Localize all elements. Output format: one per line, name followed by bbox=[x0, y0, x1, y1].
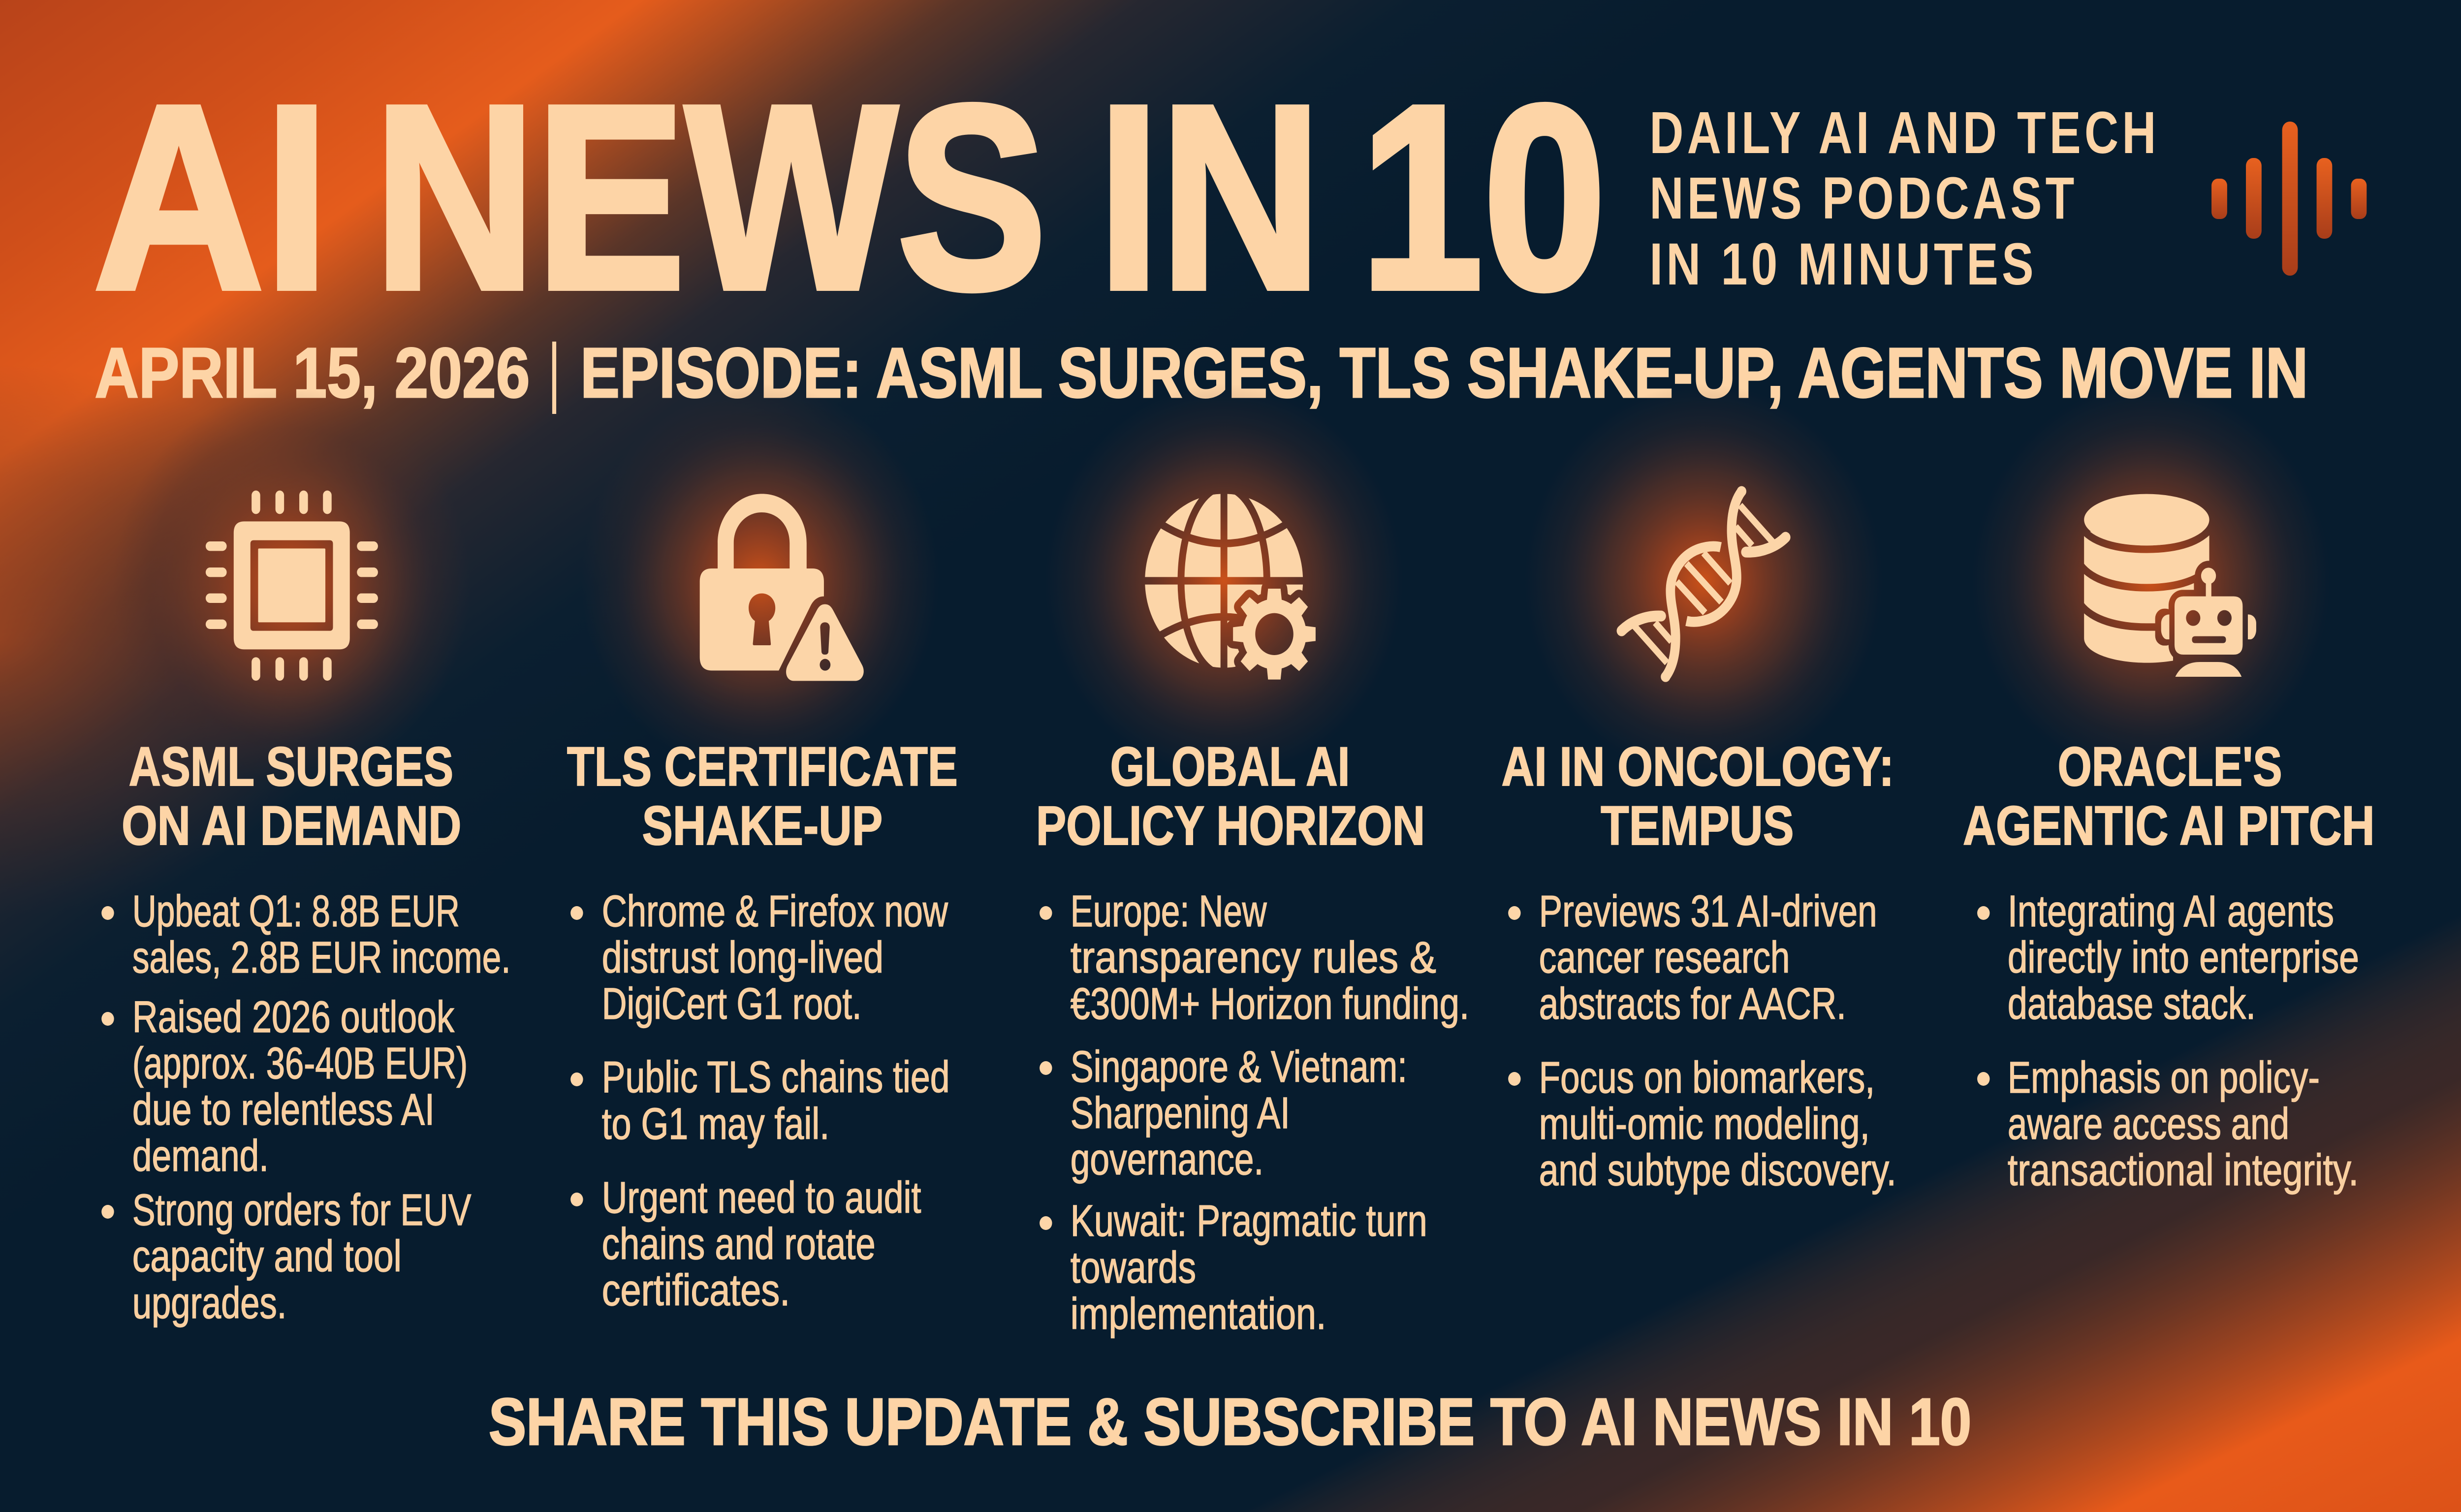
tagline: NEWS PODCAST bbox=[1649, 165, 2078, 231]
heading: TEMPUS bbox=[1601, 794, 1794, 856]
bullet list: Focus on biomarkers, bbox=[1539, 1053, 1875, 1102]
title: 10 bbox=[1360, 50, 1606, 344]
bullet list: abstracts for AACR. bbox=[1539, 979, 1846, 1029]
footer call to action: SHARE THIS UPDATE & SUBSCRIBE TO AI NEWS IN 10 bbox=[489, 1385, 1971, 1459]
bullet list: towards bbox=[1071, 1243, 1196, 1292]
bullet list: (approx. 36-40B EUR) bbox=[132, 1039, 468, 1088]
tagline: IN 10 MINUTES bbox=[1649, 231, 2037, 297]
heading: TLS CERTIFICATE bbox=[567, 735, 958, 797]
bullet list: cancer research bbox=[1539, 933, 1790, 982]
panel: TLS bbox=[567, 384, 958, 1315]
bullet list: Raised 2026 outlook bbox=[132, 992, 455, 1042]
heading bbox=[567, 735, 958, 856]
bullet list: implementation. bbox=[1071, 1289, 1326, 1339]
bullet list: DigiCert G1 root. bbox=[602, 979, 862, 1029]
icon: microchip bbox=[206, 491, 378, 681]
bullet list: transactional integrity. bbox=[2008, 1145, 2359, 1195]
bullet list: distrust long-lived bbox=[602, 933, 883, 982]
panel: Global policy bbox=[1036, 384, 1469, 1339]
bullet list: to G1 may fail. bbox=[602, 1099, 829, 1149]
icon: audio waveform bbox=[2211, 122, 2366, 276]
bullet list: transparency rules & bbox=[1071, 933, 1436, 982]
bullet list: Singapore & Vietnam: bbox=[1071, 1042, 1407, 1092]
bullet list: Public TLS chains tied bbox=[602, 1052, 950, 1102]
bullet list: capacity and tool bbox=[132, 1231, 402, 1281]
icon: globe with gear bbox=[1145, 494, 1316, 680]
bullet list: database stack. bbox=[2008, 979, 2256, 1029]
heading bbox=[1036, 735, 1425, 856]
heading: SHAKE-UP bbox=[642, 794, 883, 856]
bullet list: Upbeat Q1: 8.8B EUR bbox=[132, 886, 460, 936]
bullet list: aware access and bbox=[2008, 1099, 2289, 1149]
bullet list: Emphasis on policy- bbox=[2008, 1053, 2320, 1102]
bullet list: upgrades. bbox=[132, 1278, 286, 1328]
bullet list: €300M+ Horizon funding. bbox=[1071, 979, 1469, 1029]
bullet list: due to relentless AI bbox=[132, 1085, 435, 1134]
bullet list bbox=[1040, 886, 1469, 1339]
glow bbox=[581, 384, 939, 778]
heading: ORACLE'S bbox=[2058, 735, 2282, 797]
tagline bbox=[1649, 99, 2160, 297]
glow bbox=[113, 389, 471, 783]
heading: GLOBAL AI bbox=[1110, 735, 1350, 797]
bullet list: directly into enterprise bbox=[2008, 933, 2359, 982]
bullet list: sales, 2.8B EUR income. bbox=[132, 933, 510, 982]
heading bbox=[1502, 735, 1894, 856]
bullet list bbox=[1508, 886, 1896, 1195]
bullet list bbox=[570, 886, 950, 1315]
bullet list bbox=[101, 886, 510, 1328]
bullet list: Europe: New bbox=[1071, 886, 1267, 936]
icon: padlock with warning triangle bbox=[700, 494, 864, 681]
bullet list: Previews 31 AI-driven bbox=[1539, 886, 1877, 936]
panel: ASML bbox=[101, 389, 510, 1328]
heading: AGENTIC AI PITCH bbox=[1963, 794, 2375, 856]
panel: Oracle bbox=[1963, 384, 2375, 1195]
bullet list: Kuwait: Pragmatic turn bbox=[1071, 1196, 1427, 1246]
title: IN bbox=[1098, 50, 1322, 344]
title: AI bbox=[94, 50, 330, 344]
bullet list: Chrome & Firefox now bbox=[602, 886, 948, 936]
heading: POLICY HORIZON bbox=[1036, 794, 1425, 856]
tagline: DAILY AI AND TECH bbox=[1649, 99, 2160, 166]
glow bbox=[1525, 384, 1882, 778]
bullet list: Urgent need to audit bbox=[602, 1173, 921, 1223]
bullet list bbox=[1977, 886, 2359, 1195]
bullet list: certificates. bbox=[602, 1265, 790, 1315]
glow bbox=[1972, 384, 2330, 778]
heading: AI IN ONCOLOGY: bbox=[1502, 735, 1894, 797]
glow bbox=[1045, 384, 1403, 778]
heading: ASML SURGES bbox=[129, 735, 453, 797]
bullet list: chains and rotate bbox=[602, 1219, 876, 1269]
heading: ON AI DEMAND bbox=[122, 794, 462, 856]
heading bbox=[1963, 735, 2375, 856]
bullet list: Integrating AI agents bbox=[2008, 886, 2334, 936]
bullet list: governance. bbox=[1071, 1134, 1263, 1184]
icon: database with robot bbox=[2084, 494, 2256, 677]
date and episode line: EPISODE: ASML SURGES, TLS SHAKE-UP, AGENTS MOVE IN bbox=[580, 333, 2308, 412]
title: NEWS bbox=[374, 50, 1047, 344]
date and episode line: APRIL 15, 2026 bbox=[95, 333, 530, 412]
bullet list: Sharpening AI bbox=[1071, 1088, 1290, 1138]
heading bbox=[122, 735, 462, 856]
bullet list: and subtype discovery. bbox=[1539, 1145, 1896, 1195]
bullet list: multi-omic modeling, bbox=[1539, 1099, 1870, 1149]
bullet list: demand. bbox=[132, 1131, 269, 1181]
panel: Oncology bbox=[1502, 384, 1896, 1195]
icon: DNA helix bbox=[1622, 486, 1786, 682]
bullet list: Strong orders for EUV bbox=[132, 1185, 471, 1235]
